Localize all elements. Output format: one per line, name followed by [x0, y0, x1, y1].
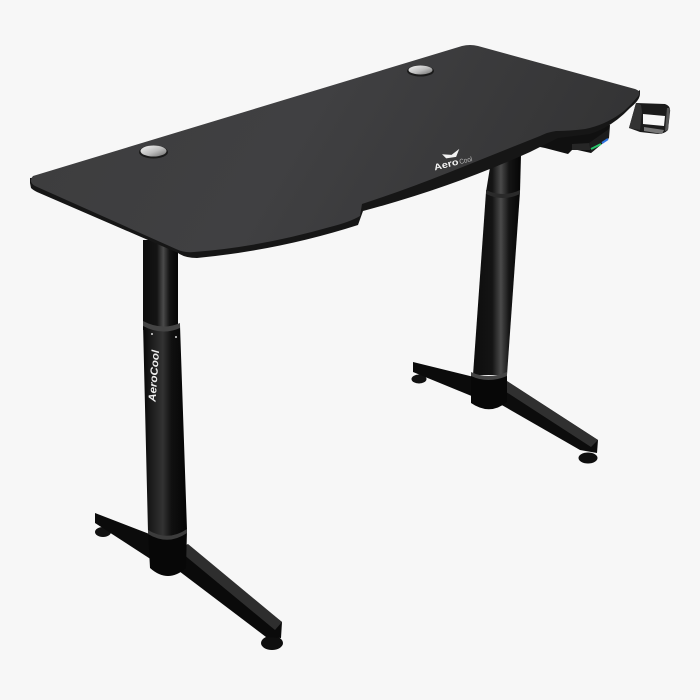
left foot back: [95, 513, 152, 560]
desktop brand logo: [431, 146, 473, 172]
left upper column: [143, 240, 178, 330]
control panel LEDs: [591, 139, 608, 149]
accessory: control panel: [530, 125, 610, 154]
left foot front: [175, 544, 283, 650]
right leg assembly: [412, 155, 598, 464]
left leg brand text: AeroCool: [146, 348, 162, 403]
right cable grommet: [407, 66, 434, 76]
left cable grommet: [139, 146, 168, 158]
left leg assembly: [95, 240, 283, 650]
desktop top surface: [31, 45, 639, 252]
desktop brand logo: Aero: [433, 156, 460, 172]
right foot back: [412, 362, 474, 397]
right foot front: [500, 380, 598, 464]
left column collar: [148, 530, 187, 576]
desktop edge: [30, 90, 640, 258]
right column: [473, 155, 521, 375]
desktop: [30, 45, 640, 258]
desktop brand logo: Cool: [459, 156, 473, 166]
accessory: cup holder: [629, 103, 670, 134]
left column screws: [151, 333, 177, 338]
right column collar: [471, 374, 507, 409]
left lower column: [143, 323, 187, 537]
